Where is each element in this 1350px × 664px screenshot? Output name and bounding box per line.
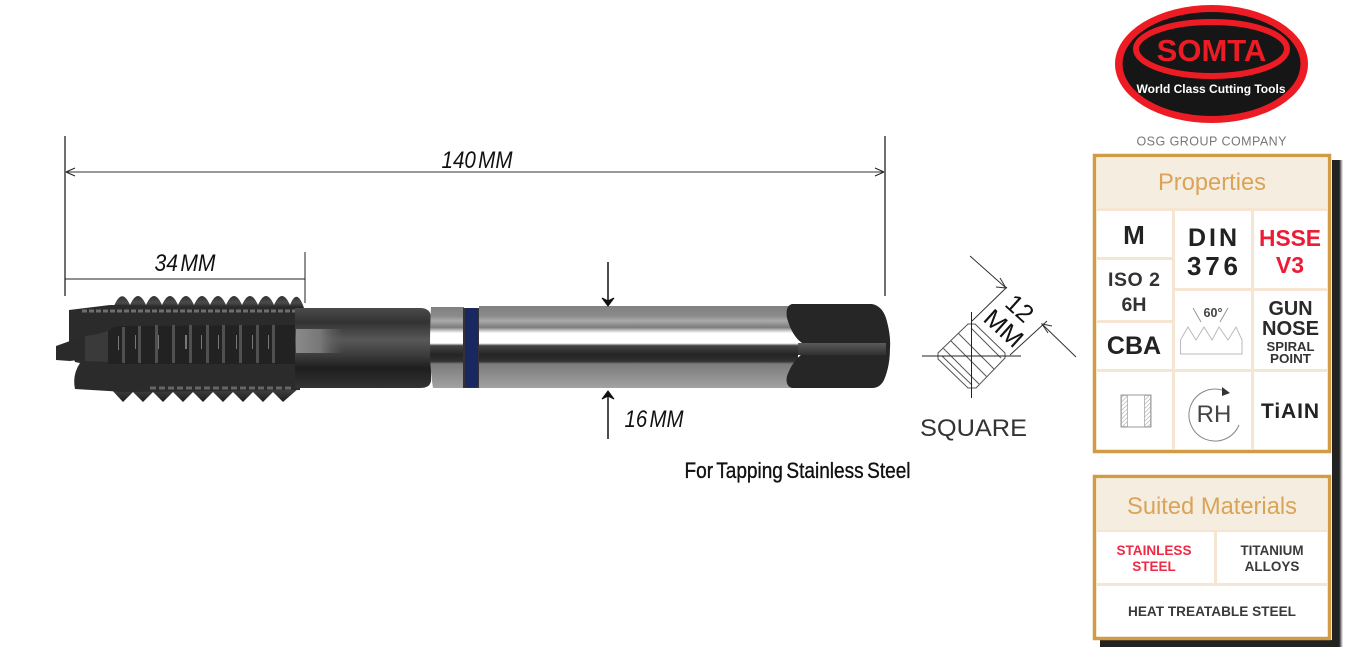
SOMTA logo: SOMTA [1157,33,1266,68]
cell: gun nose spiral point: NOSE [1262,318,1319,340]
top land highlight [82,310,300,312]
cell: HSSE V3: V3 [1276,252,1304,278]
shank [479,306,798,388]
cell: gun nose spiral point: SPIRAL [1266,339,1315,354]
groove behind blue band [463,308,480,388]
materials grid lines [1097,530,1327,586]
material: stainless steel [1116,543,1192,574]
group company tagline: OSG GROUP COMPANY [1136,134,1287,148]
material: stainless steel: STEEL [1132,559,1176,574]
bottom thread teeth [110,388,299,402]
cell: gun nose spiral point: POINT [1270,351,1311,366]
material: titanium alloys: ALLOYS [1245,559,1299,574]
overall length dimension: 140 MM [65,136,885,296]
material: titanium alloys: TITANIUM [1240,543,1304,558]
square drive diagram [920,256,1076,442]
chamfered tip steps [56,338,85,361]
thread ridges [122,325,275,363]
cell: CBA: CBA [1107,332,1161,360]
cell: ISO 2 6H [1108,269,1160,316]
cell: M: M [1123,220,1145,250]
icon: through hole [1121,395,1151,427]
icon: right hand rotation [1189,387,1239,441]
material: titanium alloys [1240,543,1304,574]
thread highlights [118,335,269,350]
cell: TiAlN: TiAIN [1261,400,1319,423]
thread length dimension: 34 MM: 34 MM [154,250,216,277]
cell: DIN 376: 376 [1187,251,1238,281]
neck ground area [296,329,345,353]
suited materials heading [1097,479,1327,530]
icon: 60 degree thread profile: 60° [1204,306,1222,320]
material: stainless steel: STAINLESS [1116,543,1192,558]
cell: HSSE V3 [1259,225,1321,278]
hatching [942,328,1001,385]
top thread teeth [112,296,304,312]
properties heading: Properties [1158,169,1266,196]
panel shadow [1100,160,1343,647]
bottom land highlight [150,386,292,390]
cell: gun nose spiral point: GUN [1268,298,1312,320]
square cross-section [938,324,1005,388]
cell: HSSE V3: HSSE [1259,225,1321,251]
central flute [108,325,295,364]
label: square: SQUARE [920,415,1027,442]
cell: ISO 2 6H: ISO 2 [1108,269,1160,291]
suited materials heading: Suited Materials [1127,493,1297,520]
collar [430,307,465,388]
panel: suited materials [1094,476,1330,638]
cell: gun nose spiral point [1262,298,1319,366]
centre lines [922,355,1021,357]
square drive end [787,304,890,388]
diameter dimension: 16 MM: 16 MM [624,406,684,433]
blue identification band [465,308,478,387]
panel: properties [1094,156,1330,452]
overall length dimension: 140 MM: 140 MM [442,147,512,174]
dimension: 12 MM: 12 [1000,289,1039,328]
square drive diagram: MM [978,304,1029,354]
properties grid lines [1097,208,1327,449]
square end flat [798,343,886,355]
caption: application: For Tapping Stainless Steel [684,458,910,483]
material: heat treatable steel: HEAT TREATABLE STEEL [1128,604,1296,619]
SOMTA logo [1115,5,1308,123]
cell: DIN 376 [1187,224,1238,281]
cell: DIN 376: DIN [1188,224,1237,252]
tap tool [56,296,890,402]
diameter dimension: 16 MM [602,262,684,439]
SOMTA logo: World Class Cutting Tools [1136,82,1286,96]
neck [295,308,431,388]
fluted threaded body [69,305,300,392]
cell: ISO 2 6H: 6H [1122,294,1146,316]
icon: right hand rotation: RH [1197,401,1231,428]
properties heading [1097,158,1327,208]
extension lines and arrows [970,256,1076,357]
icon: 60 degree thread profile [1180,306,1242,354]
